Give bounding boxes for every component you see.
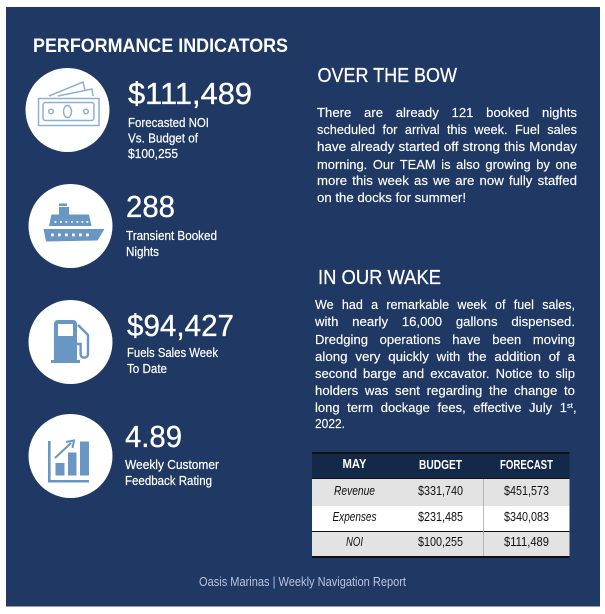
value: forecasted NOI: $111,489 — [128, 76, 252, 111]
table rows: Expenses — [332, 510, 376, 524]
text block: over the bow — [317, 105, 578, 205]
value: feedback rating: 4.89 — [125, 419, 182, 454]
text block: over the bow: scheduled for arrival this week. Fuel sales — [317, 122, 577, 137]
text block: in our wake: with nearly 16,000 gallons dispensed. — [314, 314, 575, 329]
label: fuel sales: Fuels Sales Week — [127, 345, 218, 360]
table header: MAY — [342, 457, 367, 471]
text block: in our wake: Dredging operations have been moving — [315, 332, 575, 347]
table rows: NOI — [346, 535, 363, 549]
label: forecasted NOI — [128, 115, 209, 161]
label: fuel sales: To Date — [127, 361, 167, 376]
table header: BUDGET — [419, 458, 462, 472]
footer: Oasis Marinas | Weekly Navigation Report — [199, 575, 406, 589]
text block: over the bow: on the docks for summer! — [317, 190, 466, 205]
label: forecasted NOI: $100,255 — [128, 146, 178, 161]
value: fuel sales: $94,427 — [127, 308, 234, 343]
label: booked nights — [126, 228, 217, 259]
text block: in our wake: We had a remarkable week of fuel sales, — [315, 297, 575, 312]
label: booked nights: Transient Booked — [126, 228, 217, 243]
heading: in our wake: IN OUR WAKE — [318, 267, 441, 289]
table rows — [332, 484, 549, 549]
table rows: $331,740 — [418, 484, 463, 498]
icon: rising bar chart — [28, 414, 112, 498]
value: booked nights: 288 — [126, 189, 175, 224]
table header — [342, 457, 553, 472]
text block: in our wake: , — [573, 400, 577, 415]
label: booked nights: Nights — [126, 244, 159, 259]
label: feedback rating — [125, 457, 220, 488]
icon: ship — [28, 184, 112, 268]
text block: in our wake: long term dockage fees, effective July 1 — [315, 400, 567, 415]
icon: money bills — [26, 68, 110, 152]
table rows: $100,255 — [418, 535, 463, 549]
table header: FORECAST — [500, 458, 553, 472]
text block: over the bow: morning. Our TEAM is also growing by one — [317, 157, 577, 172]
table rows: Revenue — [334, 484, 375, 498]
table rows: $111,489 — [504, 535, 549, 549]
text block: in our wake: holders was sent regarding the change to — [315, 383, 575, 398]
text block: over the bow: have already started off strong this Monday — [317, 139, 578, 154]
label: forecasted NOI: Forecasted NOI — [128, 115, 209, 130]
label: forecasted NOI: Vs. Budget of — [128, 130, 198, 146]
text block: in our wake — [314, 297, 577, 431]
table: May budget vs forecast — [312, 452, 570, 558]
panel: KPI fuel sales — [28, 300, 234, 384]
icon: fuel pump — [28, 300, 112, 384]
heading: performance indicators: PERFORMANCE INDICATORS — [33, 36, 288, 57]
table rows: $231,485 — [418, 510, 463, 524]
table rows: $451,573 — [504, 484, 549, 498]
text block: over the bow: There are already 121 booked nights — [317, 105, 577, 120]
text block: in our wake: second barge and excavator. Notice to slip — [315, 366, 575, 381]
text block: in our wake: 2022. — [315, 416, 345, 431]
table rows: $340,083 — [504, 510, 549, 524]
panel: KPI forecasted NOI — [26, 68, 252, 161]
panel: KPI customer feedback — [28, 414, 220, 498]
label: fuel sales — [127, 345, 218, 376]
label: feedback rating: Weekly Customer — [125, 457, 220, 472]
text block: in our wake: st — [567, 401, 574, 410]
label: feedback rating: Feedback Rating — [125, 473, 212, 488]
text block: over the bow: more this week as we are now fully staffed — [317, 173, 577, 188]
text block: in our wake: along very quickly with the addition of a — [315, 349, 576, 364]
panel: KPI transient booked nights — [28, 184, 217, 268]
heading: over the bow: OVER THE BOW — [318, 65, 457, 87]
